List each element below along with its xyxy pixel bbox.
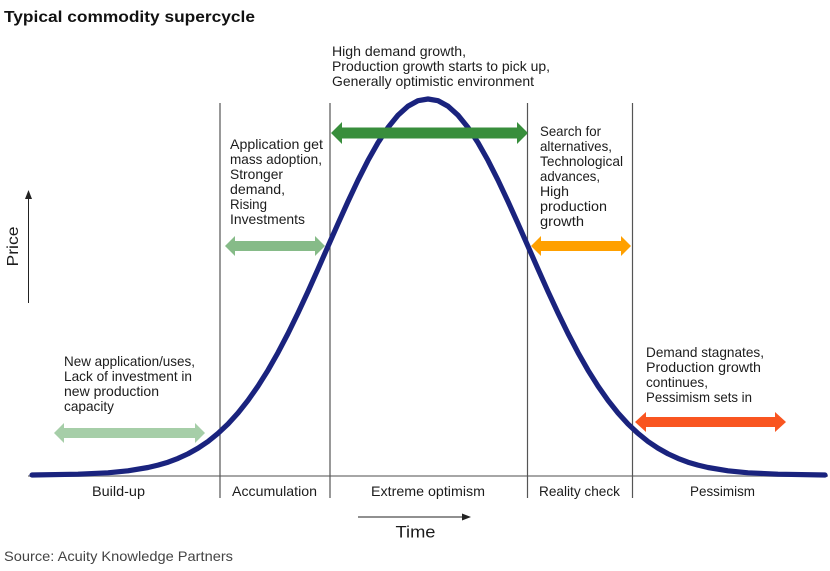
phase labels: Extreme optimism	[371, 484, 485, 499]
text: build-up description: Lack of investment in	[64, 369, 192, 384]
text: extreme optimism description: High demand growth,	[332, 44, 466, 59]
text: extreme optimism description: Production growth starts to pick up,	[332, 59, 550, 74]
phase labels	[92, 484, 755, 499]
text: extreme optimism description: Generally optimistic environment	[332, 74, 534, 89]
phase labels: Accumulation	[232, 484, 317, 499]
arrow: build-up	[54, 423, 205, 443]
text: build-up description: capacity	[64, 399, 114, 414]
text: accumulation description: Stronger	[230, 167, 283, 182]
supercycle curve	[32, 99, 825, 475]
text: pessimism description: continues,	[646, 375, 708, 390]
text: reality check description: production	[540, 199, 607, 214]
y axis: price: Price	[5, 226, 22, 266]
text: accumulation description: Investments	[230, 212, 305, 227]
arrow: reality check	[531, 236, 631, 256]
y axis: price	[5, 190, 32, 303]
text: pessimism description: Production growth	[646, 360, 761, 375]
arrow: accumulation	[225, 236, 325, 256]
phase labels: Pessimism	[690, 484, 755, 499]
text: build-up description: New application/uses,	[64, 354, 195, 369]
text: reality check description	[540, 124, 623, 229]
text: accumulation description: demand,	[230, 182, 285, 197]
title: Typical commodity supercycle	[4, 9, 255, 26]
text: extreme optimism description	[332, 44, 550, 89]
text: pessimism description: Demand stagnates,	[646, 345, 764, 360]
text: accumulation description	[230, 137, 323, 227]
text: pessimism description: Pessimism sets in	[646, 390, 752, 405]
text: reality check description: advances,	[540, 169, 600, 184]
x axis baseline	[28, 475, 828, 477]
phase labels: Build-up	[92, 484, 145, 499]
text: accumulation description: Application get	[230, 137, 323, 152]
text: pessimism description	[646, 345, 764, 405]
source: Source: Acuity Knowledge Partners	[4, 548, 233, 564]
text: accumulation description: Rising	[230, 197, 267, 212]
text: build-up description: new production	[64, 384, 159, 399]
text: reality check description: Technological	[540, 154, 623, 169]
arrow: pessimism	[635, 412, 786, 432]
x axis: time: Time	[396, 524, 436, 542]
phase labels: Reality check	[539, 484, 620, 499]
phase divider lines	[220, 103, 632, 498]
text: accumulation description: mass adoption,	[230, 152, 322, 167]
text: build-up description	[64, 354, 195, 414]
x axis: time	[358, 514, 471, 542]
text: reality check description: High	[540, 184, 569, 199]
text: reality check description: growth	[540, 214, 584, 229]
text: reality check description: Search for	[540, 124, 601, 139]
arrow: extreme optimism	[331, 122, 528, 144]
text: reality check description: alternatives,	[540, 139, 612, 154]
